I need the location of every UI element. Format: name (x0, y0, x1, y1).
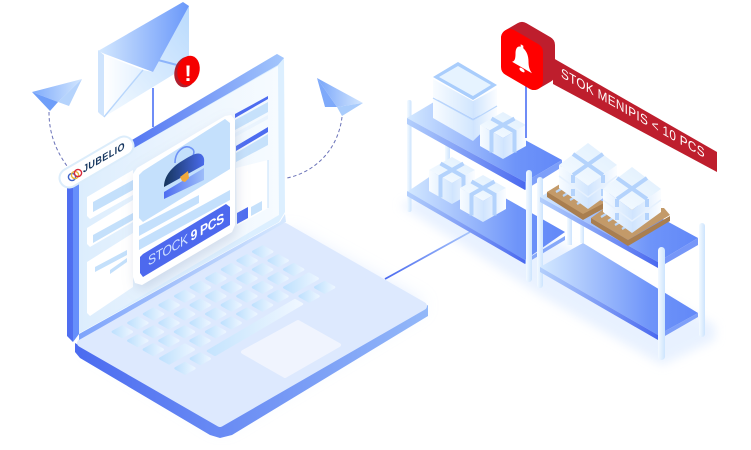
laptop (67, 54, 428, 438)
floor shadows (88, 185, 715, 428)
shelf left (407, 62, 565, 282)
screen right column (235, 96, 268, 226)
icon: bag (164, 147, 204, 199)
card bars (139, 195, 199, 236)
dashed arc left (49, 112, 67, 166)
gift box top shelf (480, 112, 526, 159)
lower plank left (407, 165, 565, 264)
connector: bell to shelf (525, 85, 527, 138)
icon: bell notification (510, 31, 546, 81)
laptop base side (75, 305, 428, 438)
gift box lower shelf B (460, 175, 506, 222)
product card (133, 115, 235, 285)
gift box lower shelf A (429, 157, 475, 204)
laptop base top (81, 227, 423, 423)
stacked flat boxes (433, 62, 497, 141)
screen left panels (87, 170, 133, 316)
icon: red alert badge (171, 53, 203, 90)
shelf right (537, 143, 705, 360)
pallet A (547, 184, 612, 220)
lower plank right (540, 243, 698, 340)
pallet B (591, 208, 670, 246)
stock button: STOCK 9 PCS (148, 209, 224, 269)
keyboard (113, 246, 334, 374)
pallet box B (603, 167, 661, 233)
dashed arc right (287, 117, 342, 178)
product image panel (139, 119, 230, 222)
envelope (98, 2, 189, 117)
icon: red alert badge: ! (184, 61, 192, 86)
connector line: laptop to shelf (385, 232, 470, 279)
icon: logo mark (68, 169, 82, 181)
trackpad (243, 322, 339, 376)
pallet box A (559, 143, 617, 209)
stock button (140, 204, 230, 277)
upper plank left (407, 96, 562, 190)
connector: envelope to laptop (152, 88, 154, 127)
icon: paper plane right (317, 78, 363, 116)
Jubelio logo pill: JUBELIO (83, 141, 125, 176)
Jubelio logo pill (68, 141, 125, 181)
icon: paper plane left (32, 79, 82, 111)
upper plank right (540, 174, 698, 268)
laptop lid (67, 54, 286, 342)
ribbon: low stock label: STOK MENIPIS < 10 PCS (561, 65, 705, 161)
